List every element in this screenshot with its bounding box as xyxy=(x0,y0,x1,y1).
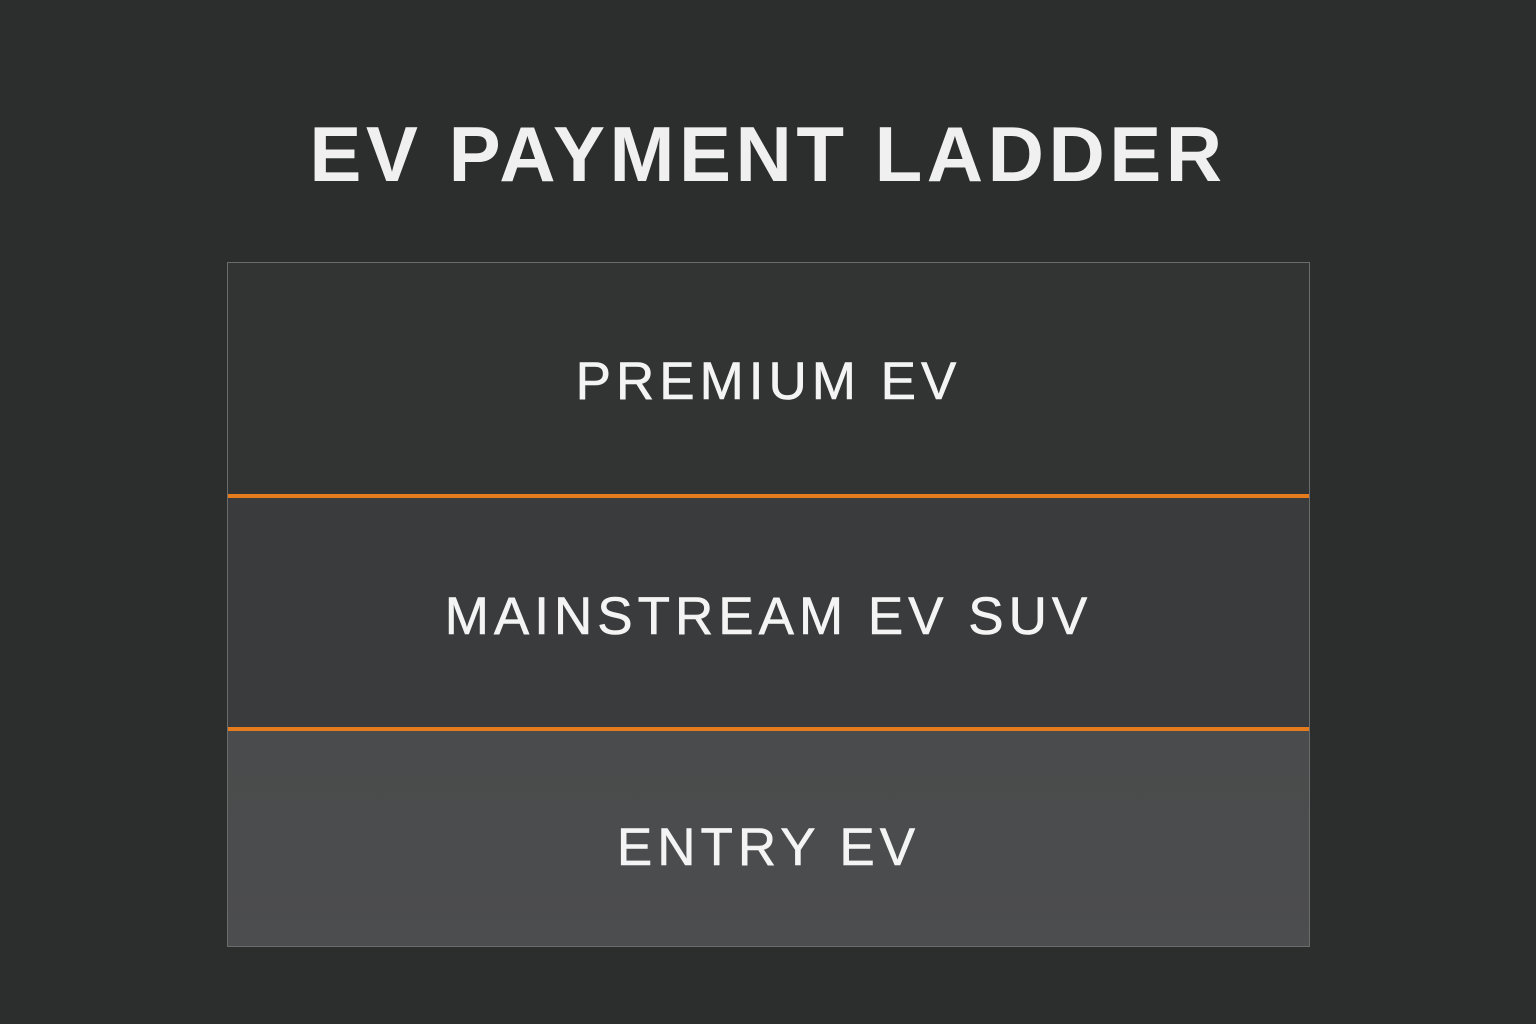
title: EV PAYMENT LADDER xyxy=(309,110,1227,198)
tier: entry: ENTRY EV xyxy=(617,818,920,876)
divider: orange line 1 xyxy=(228,494,1309,498)
tier: mainstream xyxy=(228,498,1309,734)
tier: premium: PREMIUM EV xyxy=(576,352,961,410)
ladder panel xyxy=(227,262,1310,947)
tier: premium xyxy=(228,263,1309,499)
divider: orange line 2 xyxy=(228,727,1309,731)
tier: mainstream: MAINSTREAM EV SUV xyxy=(445,586,1092,646)
tier: entry xyxy=(228,731,1309,963)
